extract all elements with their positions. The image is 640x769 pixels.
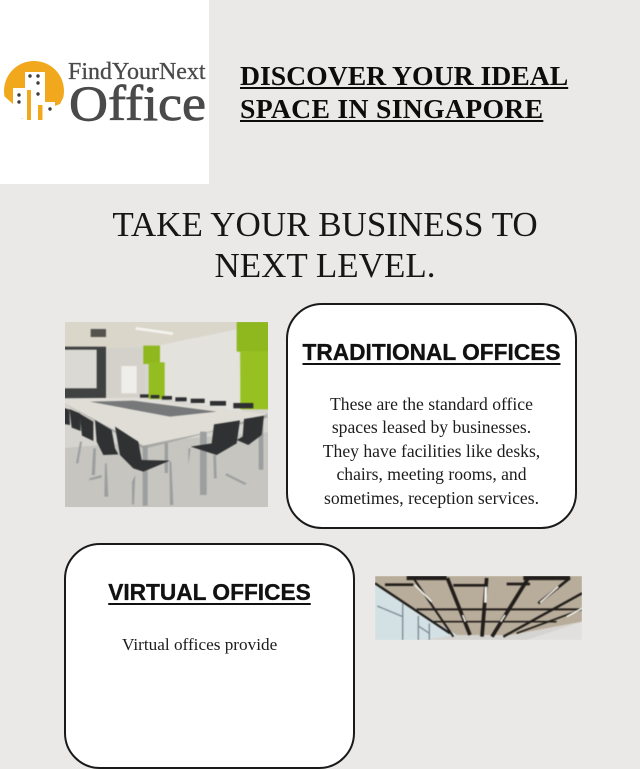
icon: building sun logo <box>4 61 64 120</box>
title: SPACE IN SINGAPORE <box>240 93 543 124</box>
panel: traditional offices <box>286 303 577 529</box>
photo: office ceiling <box>375 576 582 640</box>
logo wordmark: Office <box>69 75 206 131</box>
photo: conference room <box>65 322 268 507</box>
main heading: NEXT LEVEL. <box>214 246 435 285</box>
description: traditional offices: chairs, meeting rooms, and <box>336 464 527 484</box>
main heading: TAKE YOUR BUSINESS TO <box>112 205 538 244</box>
description: virtual offices: Virtual offices provide <box>122 635 277 654</box>
description: traditional offices: They have facilities like desks, <box>323 441 540 461</box>
description: traditional offices: spaces leased by businesses. <box>332 417 531 437</box>
heading: virtual offices: VIRTUAL OFFICES <box>108 579 311 605</box>
description: traditional offices: sometimes, reception services. <box>324 488 539 508</box>
description: traditional offices <box>323 394 540 508</box>
logo wordmark: FindYourNext <box>68 59 206 85</box>
main heading <box>112 205 538 285</box>
logo panel <box>0 0 209 184</box>
title: DISCOVER YOUR IDEAL <box>240 60 568 91</box>
description: traditional offices: These are the standard office <box>330 394 533 414</box>
title <box>240 60 568 124</box>
heading: traditional offices: TRADITIONAL OFFICES <box>303 339 560 365</box>
panel: virtual offices <box>64 543 355 769</box>
